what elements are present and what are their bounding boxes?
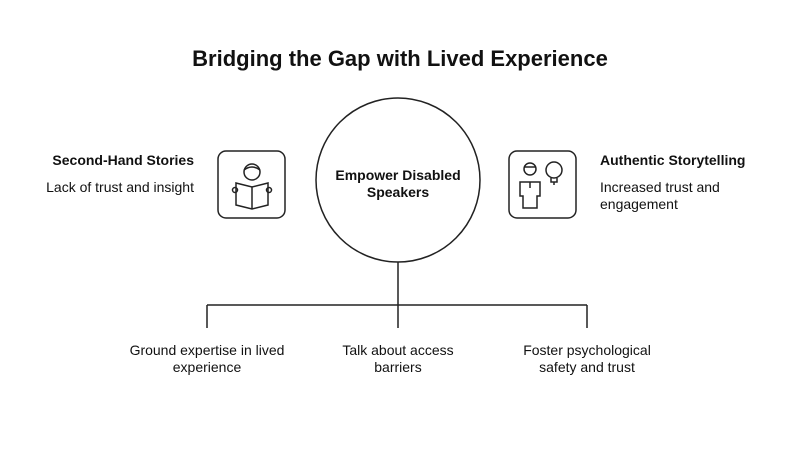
left heading: Second-Hand Stories — [52, 152, 194, 168]
central circle — [316, 98, 480, 262]
bottom item 1 — [130, 342, 284, 375]
bottom item 1: Ground expertise in lived — [130, 342, 284, 358]
bottom item 2 — [342, 342, 454, 375]
connector lines — [207, 262, 587, 328]
circle label: Speakers — [367, 184, 429, 200]
circle label: Empower Disabled — [335, 167, 461, 183]
bottom item 3 — [523, 342, 651, 375]
right text: engagement — [600, 196, 678, 212]
left text: Lack of trust and insight — [46, 179, 194, 195]
bottom item 3: Foster psychological — [523, 342, 651, 358]
circle label — [335, 167, 461, 200]
right heading: Authentic Storytelling — [600, 152, 745, 168]
right text: Increased trust and — [600, 179, 720, 195]
bottom item 1: experience — [173, 359, 241, 375]
bottom item 2: barriers — [374, 359, 422, 375]
right text — [600, 179, 720, 212]
bottom item 2: Talk about access — [342, 342, 454, 358]
icon: person with lightbulb — [509, 151, 576, 218]
title: Bridging the Gap with Lived Experience — [192, 46, 608, 71]
icon: reading person — [218, 151, 285, 218]
bottom item 3: safety and trust — [539, 359, 635, 375]
